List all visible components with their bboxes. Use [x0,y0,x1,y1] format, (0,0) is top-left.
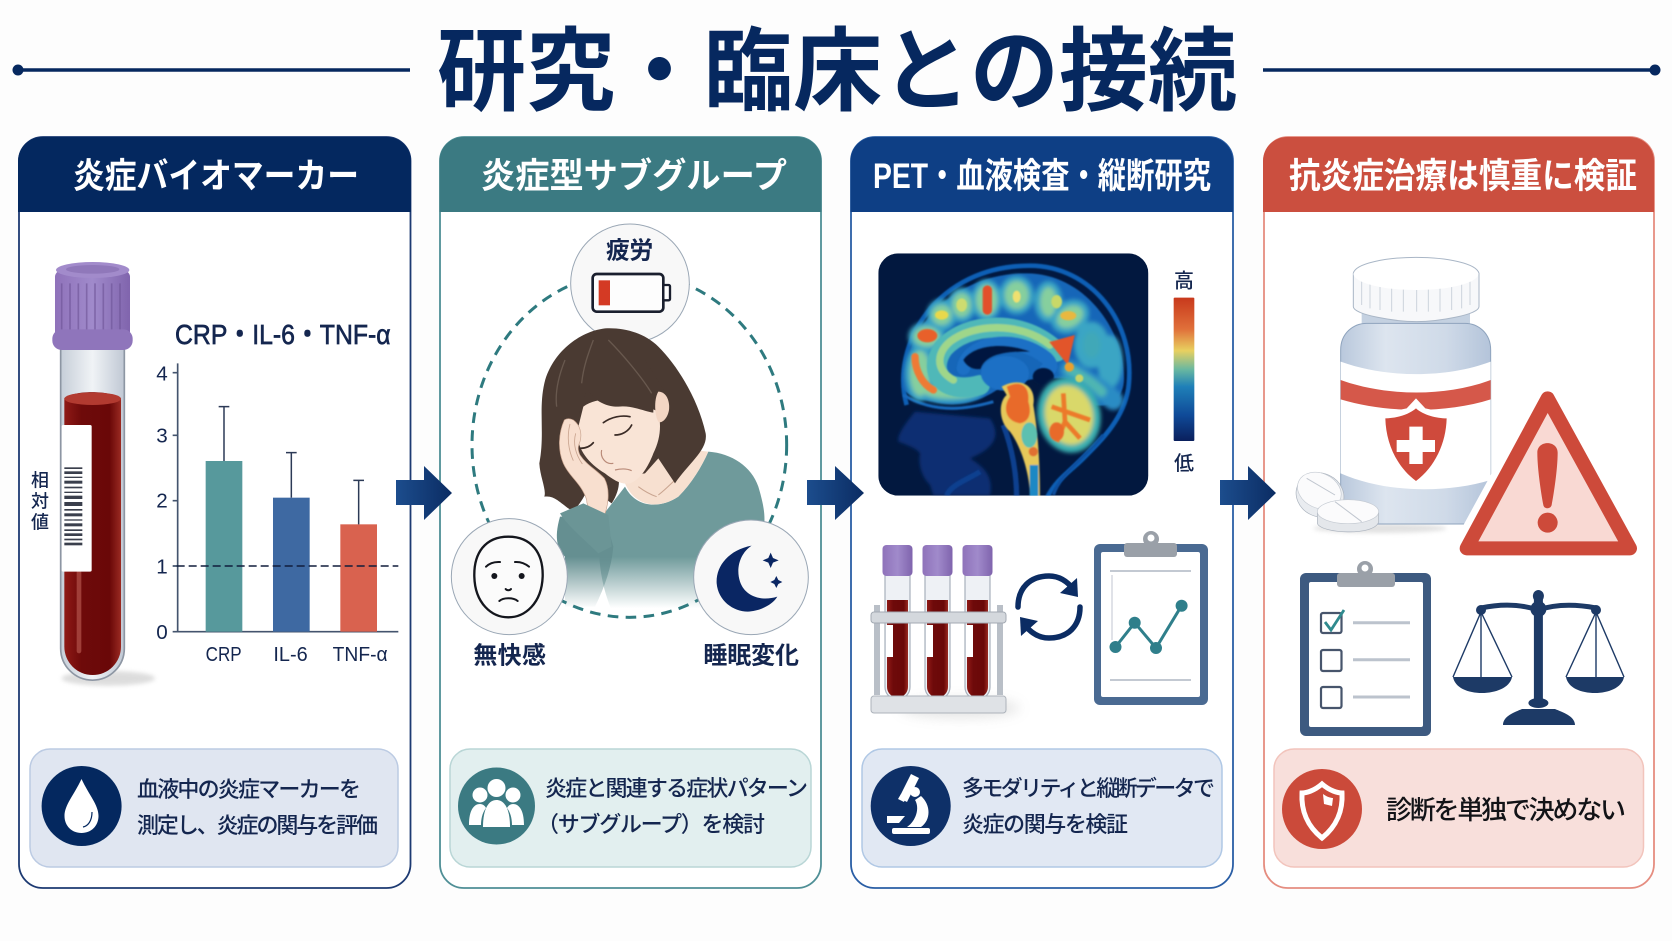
symptom: fatigue [571,224,689,343]
tube and bar chart [31,262,398,686]
title rule right [1263,64,1660,76]
chart title: CRP・IL-6・TNF-α [175,319,391,350]
callout text: 測定し、炎症の関与を評価 [137,813,378,838]
heading: caution: 抗炎症治療は慎重に検証 [1289,157,1637,196]
symptom: anhedonia [451,519,567,669]
dashed ring [472,273,787,617]
axis ticks labels: 2 [156,490,168,513]
icon: microscope [871,766,951,846]
icon: tube rack [871,545,1020,718]
panel: inflammatory subgroup [440,137,822,888]
header: PET [850,137,1233,212]
icon: repeat arrows [1018,576,1080,638]
bar TNF [340,524,377,632]
header: biomarkers [18,137,411,212]
arrow 2 [807,466,864,520]
header: caution [1263,137,1654,212]
icon: shield [1282,769,1362,849]
colour scale: 低 [1174,452,1194,475]
colour scale [1174,270,1194,475]
callout text [137,777,378,838]
panel: PET, blood tests, longitudinal [850,137,1233,888]
category labels: IL-6 [273,643,308,666]
icon: moon and stars [717,546,782,612]
callout: caution [1274,749,1644,867]
gyri [905,276,1123,403]
bar chart [156,363,398,666]
title: 研究・臨床との接続 [437,22,1237,123]
bar IL-6 [273,498,310,632]
arrow 1 [396,466,452,520]
callout text [962,776,1215,837]
axis label: 値 [31,512,49,532]
icon: drop [42,766,122,846]
PET scan and colour scale [878,253,1194,498]
panel: anti-inflammatory caution [1263,137,1654,888]
icon: pills [1289,465,1379,532]
bar CRP [206,461,242,632]
icon: low battery [593,274,670,312]
callout text: 炎症と関連する症状パターン [545,776,808,801]
icon: people [458,768,535,844]
callout: biomarkers [30,749,398,867]
axis label: 対 [31,492,49,512]
callout text: （サブグループ）を検討 [537,812,765,837]
axis label [31,471,49,532]
category labels [206,643,388,666]
axis ticks labels: 0 [156,621,168,644]
heading: PET: PET・血液検査・縦断研究 [873,157,1211,196]
callout text [537,776,808,837]
symptom: sleep change: 睡眠変化 [703,642,799,669]
callout: PET [862,749,1222,867]
icon: medicine bottle [1313,257,1491,533]
callout text: 血液中の炎症マーカーを [137,777,361,802]
icon: blood tube [52,262,155,686]
icon: sad face [474,537,543,617]
callout: subgroup [450,749,811,867]
axis ticks labels: 3 [156,425,168,448]
symptom: fatigue: 疲労 [606,238,653,265]
PET brain image [878,253,1148,498]
icon: balance scale [1453,590,1624,725]
heading: subgroup: 炎症型サブグループ [481,156,787,196]
colour scale: 高 [1174,270,1194,293]
medicine and warning [1289,257,1632,548]
panel: inflammatory biomarkers [18,137,411,888]
axis ticks labels: 4 [156,363,168,386]
icon: clipboard chart [1094,531,1208,705]
category labels: TNF-α [333,643,388,666]
axis ticks labels: 1 [156,555,168,578]
symptom diagram [451,224,808,669]
heading: biomarkers: 炎症バイオマーカー [73,157,359,196]
callout text: 多モダリティと縦断データで [962,776,1215,801]
illustration: woman with headache [539,328,765,610]
icon: warning triangle [1465,397,1632,548]
symptom: anhedonia: 無快感 [473,642,546,669]
icon: checklist clipboard [1300,561,1431,736]
header: subgroup [440,137,822,212]
callout text: 診断を単独で決めない [1386,795,1626,825]
arrow 3 [1220,466,1276,520]
axis ticks labels [156,363,168,644]
symptom: sleep change [694,520,808,669]
category labels: CRP [206,643,242,666]
title rule left [12,64,410,76]
axis label: 相 [31,471,49,491]
callout text: 炎症の関与を検証 [962,812,1128,837]
